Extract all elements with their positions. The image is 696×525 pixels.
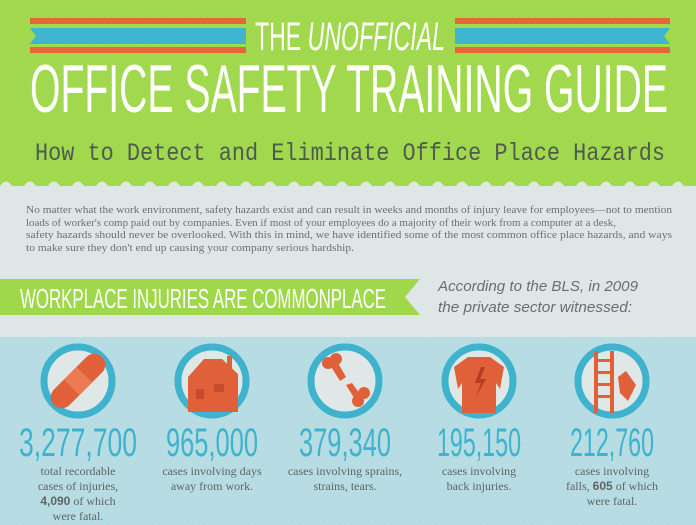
BLS intro text: the private sector witnessed: bbox=[438, 299, 632, 316]
stat labels: cases involving bbox=[575, 464, 649, 478]
ribbon stripes left bbox=[30, 18, 246, 53]
title line 1: THE UNOFFICIAL bbox=[255, 15, 445, 59]
stat labels: cases involving bbox=[442, 464, 516, 478]
stat labels: cases of injuries, bbox=[38, 479, 118, 493]
icon: broken bone bbox=[311, 347, 379, 415]
stat labels: were fatal. bbox=[587, 494, 637, 508]
stat numbers: 379,340 bbox=[299, 421, 391, 465]
intro paragraph: No matter what the work environment, safety hazards exist and can result in weeks and months of injury leave for employees—not to mention bbox=[26, 205, 672, 216]
icon: back bbox=[445, 347, 513, 415]
BLS intro text bbox=[437, 278, 639, 316]
stat labels: strains, tears. bbox=[314, 479, 376, 493]
BLS intro text: According to the BLS, in 2009 bbox=[437, 278, 639, 295]
stat labels: total recordable bbox=[41, 464, 115, 478]
icon: house bbox=[178, 347, 246, 415]
intro paragraph: safety hazards should never be overlooked. With this in mind, we have identified some of the most common office place hazards, and ways bbox=[26, 230, 672, 241]
stat labels: were fatal. bbox=[53, 509, 103, 523]
section banner bbox=[0, 279, 420, 315]
icon: ladder fall bbox=[578, 347, 646, 415]
icon: bandage bbox=[44, 347, 112, 415]
stat numbers: 965,000 bbox=[166, 421, 258, 465]
intro paragraph: to make sure they don't end up causing your company serious hardship. bbox=[26, 243, 354, 254]
intro paragraph: loads of worker's comp paid out by companies. Even if most of your employees do a majority of their work from a computer at a desk, bbox=[26, 218, 616, 229]
ribbon stripes right bbox=[455, 18, 670, 53]
stat numbers: 3,277,700 bbox=[19, 421, 137, 465]
stats panel bbox=[0, 337, 696, 525]
stat labels bbox=[38, 464, 658, 523]
stat labels: cases involving days bbox=[162, 464, 262, 478]
section banner: WORKPLACE INJURIES ARE COMMONPLACE bbox=[20, 283, 386, 314]
stat numbers: 195,150 bbox=[437, 421, 521, 465]
stat labels: 4,090 of which bbox=[40, 494, 116, 508]
stat labels: away from work. bbox=[171, 479, 253, 493]
stat labels: cases involving sprains, bbox=[288, 464, 402, 478]
stat labels: back injuries. bbox=[447, 479, 511, 493]
stat labels: falls, 605 of which bbox=[566, 479, 658, 493]
stat numbers bbox=[19, 421, 654, 465]
intro paragraph bbox=[26, 205, 672, 254]
header panel bbox=[0, 0, 696, 196]
